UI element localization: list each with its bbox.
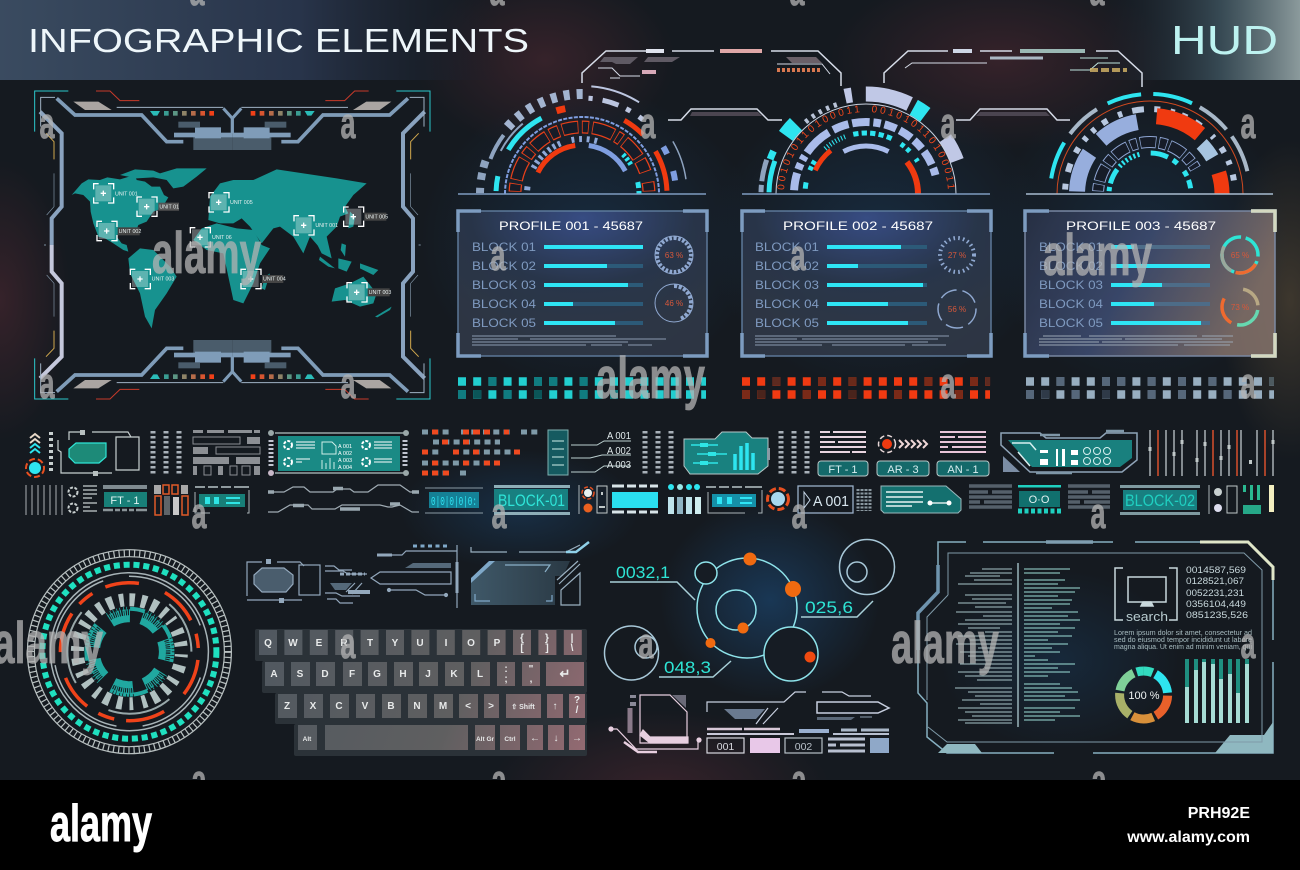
profile title: PROFILE 003 - 45687	[1066, 219, 1216, 233]
map markers: UNIT 01	[159, 204, 179, 210]
map markers: UNIT 06	[212, 235, 232, 241]
column ticks 2	[645, 431, 671, 475]
key labels: ;	[504, 674, 508, 685]
indicator icons	[579, 485, 607, 514]
teal data panel: A 003	[338, 458, 352, 464]
key labels: Y	[392, 638, 399, 649]
right text column	[1024, 569, 1080, 720]
watermarks: a	[1240, 359, 1256, 408]
key labels: →	[572, 733, 582, 744]
key labels: O	[467, 638, 475, 649]
watermarks: a	[340, 359, 356, 408]
key labels: Z	[284, 701, 290, 712]
gauge 1 baseline	[458, 193, 706, 195]
block rows: BLOCK 03	[472, 280, 536, 292]
block rows: BLOCK 04	[1039, 299, 1104, 311]
block rows: BLOCK 02	[755, 261, 819, 273]
pink widget set	[609, 692, 889, 753]
panel: world map frame	[35, 91, 430, 399]
FT-1 box: FT - 1	[110, 495, 140, 507]
block rows: BLOCK 05	[1039, 318, 1103, 330]
key labels: ]	[545, 643, 549, 654]
percentage dials: 27 %	[948, 251, 966, 260]
key labels: N	[413, 701, 421, 712]
panel: profile 003	[1025, 211, 1275, 356]
key labels: ?	[574, 695, 580, 706]
fine print lines	[755, 336, 949, 345]
key labels: H	[399, 669, 407, 680]
gauge 3	[1049, 92, 1250, 194]
gauge 2 binary text	[777, 106, 955, 190]
key labels: X	[310, 701, 317, 712]
orange nodes	[706, 552, 816, 662]
key labels: S	[297, 669, 304, 680]
key labels: W	[288, 638, 298, 649]
A 001 box	[798, 486, 870, 513]
BLOCK-02 label: BLOCK-02	[1125, 491, 1195, 510]
key labels: I	[445, 638, 448, 649]
image id: PRH92E	[1188, 805, 1250, 822]
watermarks: alamy	[152, 221, 261, 286]
key labels: A	[270, 669, 278, 680]
map markers: UNIT 002	[119, 229, 141, 235]
radar dial	[27, 550, 231, 754]
column ticks	[153, 431, 179, 475]
pixel strip teal	[458, 377, 706, 398]
key labels: D	[321, 669, 329, 680]
key labels: "	[529, 664, 534, 675]
profile title: PROFILE 001 - 45687	[499, 219, 643, 233]
watermarks: a	[490, 231, 506, 280]
binary display: 0|0|0|0|0:	[431, 495, 477, 509]
vertical sliders	[1148, 430, 1274, 476]
key labels: Q	[264, 638, 272, 649]
red and grey dot matrix	[422, 432, 540, 473]
watermarks: a	[40, 99, 55, 148]
block rows: BLOCK 01	[472, 242, 536, 254]
alamy logo: alamy	[50, 795, 152, 853]
end icons	[1209, 485, 1274, 514]
A 001 box: A 001	[813, 493, 849, 510]
map markers: UNIT 005	[230, 200, 253, 206]
AN-1 tag: AN - 1	[947, 464, 979, 476]
block rows	[1039, 242, 1210, 330]
fine print lines	[1039, 336, 1233, 345]
percentage dials: 63 %	[665, 251, 683, 260]
percentage dials: 73 %	[1231, 303, 1249, 312]
pixel strip red	[742, 377, 990, 398]
key labels: F	[349, 669, 355, 680]
block rows: BLOCK 05	[472, 318, 536, 330]
level bars	[154, 485, 188, 515]
teal data panel: A 001	[338, 444, 352, 450]
key labels: /	[576, 705, 579, 716]
percentage dials: 65 %	[1231, 251, 1249, 260]
connector brackets above gauges	[582, 51, 1142, 120]
key labels: J	[425, 669, 431, 680]
key labels: V	[362, 701, 369, 712]
key labels: >	[488, 701, 494, 712]
key labels: <	[465, 701, 471, 712]
key labels: U	[416, 638, 424, 649]
teal hexagon plate	[1001, 431, 1137, 473]
map markers: UNIT 001	[115, 191, 138, 197]
percentage dials: 56 %	[948, 305, 966, 314]
website: www.alamy.com	[1126, 829, 1250, 846]
key labels: L	[477, 669, 483, 680]
lorem ipsum	[1114, 630, 1252, 651]
block rows: BLOCK 01	[755, 242, 819, 254]
key labels	[264, 633, 582, 744]
key labels: R	[340, 638, 348, 649]
bracket list with A labels: A 003	[607, 460, 631, 471]
column ticks 3	[781, 431, 807, 475]
FT-1 tag	[818, 432, 868, 476]
HUD heading: HUD	[1171, 17, 1278, 63]
percentage dials	[655, 236, 693, 322]
bracket list with A labels	[548, 430, 631, 475]
gauge 3 baseline	[1026, 193, 1273, 195]
key labels: T	[367, 638, 373, 649]
watermarks: a	[1092, 756, 1107, 805]
keyboard	[255, 629, 587, 756]
chevrons and target icon	[26, 432, 51, 477]
block rows: BLOCK 02	[472, 261, 536, 273]
teal tag	[881, 486, 961, 513]
map markers	[94, 184, 391, 302]
mini panel	[195, 487, 249, 513]
key labels: Alt Gr	[476, 736, 494, 743]
watermarks: a	[940, 359, 956, 408]
watermarks: a	[638, 619, 654, 668]
stock footer band	[0, 780, 1300, 870]
number list: 0356104,449	[1186, 599, 1246, 610]
key labels: ←	[530, 733, 540, 744]
bracket list with A labels: A 002	[607, 446, 631, 457]
key tops	[259, 630, 585, 750]
AR-3 tag with arrows	[877, 436, 929, 476]
binary display	[425, 488, 483, 513]
teal data panel: A 004	[338, 465, 352, 471]
block rows: BLOCK 03	[755, 280, 819, 292]
target icon	[768, 488, 788, 510]
block pattern	[193, 430, 260, 475]
gauge 2	[758, 86, 964, 194]
watermarks: a	[1240, 619, 1256, 668]
key labels: [	[520, 643, 524, 654]
number list: 0014587,569	[1186, 565, 1246, 576]
readouts: 048,3	[664, 658, 711, 677]
grey block pattern left	[969, 486, 1012, 507]
AR-3 tag with arrows: AR - 3	[887, 464, 919, 476]
key labels: B	[387, 701, 395, 712]
key labels: E	[316, 638, 323, 649]
code boxes: 002	[795, 741, 812, 753]
block rows	[755, 242, 927, 330]
search icon	[1115, 568, 1177, 624]
glass panel widget	[471, 542, 589, 605]
widget row 2	[26, 484, 1274, 515]
gauge 2 binary text: 001010110100011	[777, 106, 860, 190]
map markers: UNIT 001	[315, 223, 338, 229]
profile title: PROFILE 002 - 45687	[783, 219, 933, 233]
key labels: ↓	[554, 733, 558, 744]
atom diagram	[604, 540, 894, 681]
watermarks: a	[790, 231, 806, 280]
watermarks: a	[192, 756, 207, 805]
watermarks: a	[340, 619, 356, 668]
percentage dials	[938, 238, 976, 328]
teal node box: O·O	[1029, 494, 1050, 506]
fine print lines	[472, 336, 666, 345]
bar chart	[1187, 659, 1247, 723]
search icon: search	[1126, 610, 1168, 624]
watermarks: a	[792, 489, 807, 538]
tick lines	[26, 485, 62, 515]
BLOCK-02 label	[1120, 485, 1200, 515]
key labels: ,	[530, 674, 533, 685]
hex frame widget	[58, 430, 139, 476]
watermarks: a	[1240, 99, 1256, 148]
teal data panel: A 002	[338, 451, 352, 457]
percentage dials	[1217, 232, 1263, 328]
teal data panel	[268, 430, 409, 476]
pixel strip grey	[1026, 377, 1274, 398]
block rows: BLOCK 03	[1039, 280, 1103, 292]
key labels: }	[545, 633, 549, 644]
BLOCK-01 label: BLOCK-01	[498, 491, 565, 510]
key labels: ↵	[560, 666, 570, 681]
widget row 1	[26, 430, 1274, 477]
block rows	[472, 242, 643, 330]
watermarks: a	[192, 489, 207, 538]
map markers: UNIT 003	[152, 277, 174, 283]
slider panel with bars	[684, 432, 770, 474]
title: INFOGRAPHIC ELEMENTS	[28, 22, 529, 59]
key labels: ↑	[552, 701, 558, 712]
block rows: BLOCK 04	[755, 299, 820, 311]
watermarks: a	[492, 489, 507, 538]
percentage dials: 46 %	[665, 299, 683, 308]
code boxes: 001	[717, 741, 734, 753]
teal node box	[1018, 485, 1061, 511]
lorem ipsum: sed do eiusmod tempor incididunt ut labore	[1114, 637, 1252, 644]
panel: data console	[918, 542, 1273, 753]
block rows: BLOCK 02	[1039, 261, 1103, 273]
map markers: UNIT 004	[263, 277, 286, 283]
key labels: C	[335, 701, 343, 712]
readouts: 025,6	[805, 598, 853, 617]
watermarks: a	[492, 756, 507, 805]
number list: 0052231,231	[1186, 588, 1244, 599]
lorem ipsum: magna aliqua. Ut enim ad minim veniam, qui	[1114, 644, 1252, 651]
watermarks: alamy	[1043, 223, 1152, 288]
key labels: M	[439, 701, 447, 712]
key labels: {	[520, 633, 524, 644]
key labels: :	[504, 664, 508, 675]
BLOCK-01 label	[494, 485, 570, 515]
key labels: Ctrl	[504, 736, 516, 743]
circuit lines	[268, 485, 419, 512]
cyan glow panel	[612, 486, 658, 512]
block rows: BLOCK 04	[472, 299, 537, 311]
left text column	[955, 569, 1012, 723]
key labels: |	[571, 633, 574, 644]
world map	[72, 168, 392, 328]
number list: 0851235,526	[1186, 610, 1248, 621]
panel: profile 002	[742, 211, 991, 356]
watermarks: alamy	[891, 611, 999, 676]
divider	[1017, 563, 1019, 727]
dots and columns	[668, 484, 701, 514]
spiky ring	[74, 597, 185, 707]
watermarks: a	[640, 99, 656, 148]
FT-1 tag: FT - 1	[828, 464, 858, 476]
key labels: K	[450, 669, 458, 680]
readouts	[616, 563, 853, 677]
watermarks: a	[1090, 489, 1106, 538]
mini panel blue	[706, 487, 762, 513]
dashed dials	[68, 486, 97, 512]
lorem ipsum: Lorem ipsum dolor sit amet, consectetur ad	[1114, 630, 1252, 637]
watermarks: a	[792, 756, 807, 805]
watermarks: alamy	[596, 346, 705, 411]
watermarks: a	[940, 99, 956, 148]
AN-1 tag	[937, 432, 989, 476]
bracket list with A labels: A 001	[607, 431, 631, 442]
key labels: G	[373, 669, 381, 680]
map markers: UNIT 005	[365, 214, 388, 220]
grey block pattern right	[1068, 486, 1110, 507]
gauge 2 baseline	[742, 193, 990, 195]
FT-1 box	[103, 485, 147, 510]
key labels: P	[494, 638, 501, 649]
watermarks: a	[340, 99, 356, 148]
number list: 0128521,067	[1186, 576, 1244, 587]
donut chart	[1120, 671, 1168, 719]
key backplates	[255, 629, 587, 756]
panel: profile 001	[458, 211, 707, 356]
key labels: Alt	[303, 736, 312, 743]
map markers: UNIT 003	[369, 290, 391, 296]
code boxes	[707, 738, 889, 753]
watermarks: a	[40, 359, 55, 408]
number list	[1186, 565, 1248, 621]
gauge 1	[476, 85, 687, 194]
key labels: ⇧ Shift	[511, 703, 535, 711]
key labels: \	[571, 643, 574, 654]
readouts: 0032,1	[616, 563, 670, 582]
small widget set	[247, 545, 457, 608]
block rows: BLOCK 05	[755, 318, 819, 330]
donut label: 100 %	[1128, 690, 1160, 702]
block rows: BLOCK 01	[1039, 242, 1103, 254]
